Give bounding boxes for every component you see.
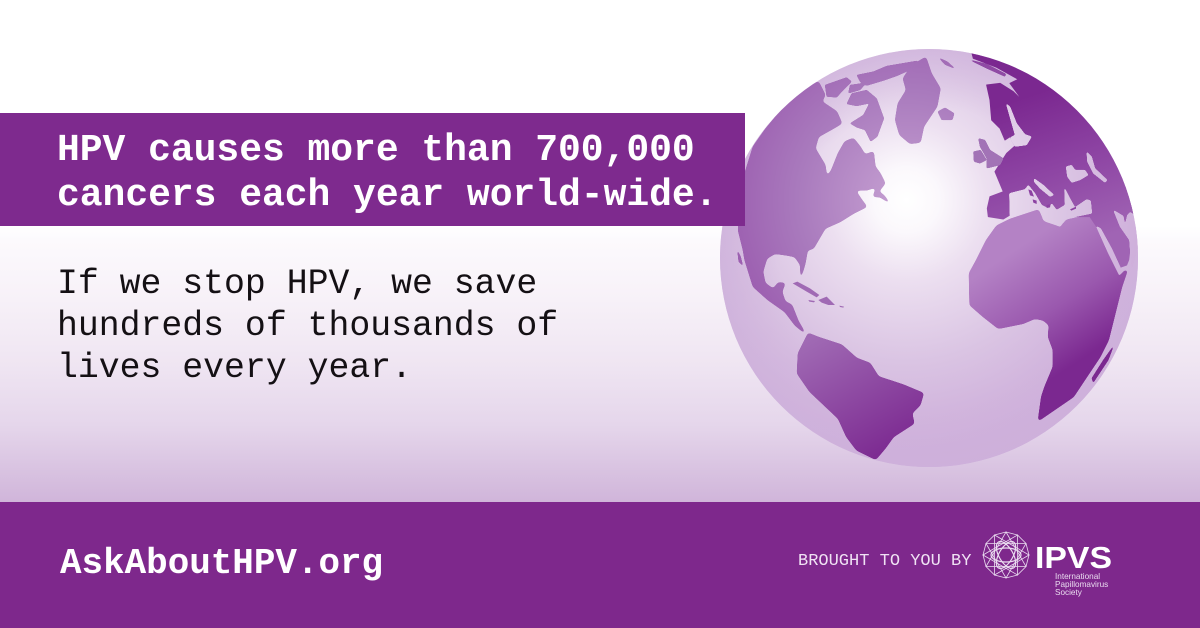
logo subtitle: International	[1055, 572, 1100, 581]
Africa	[969, 210, 1127, 421]
website link: AskAboutHPV.org	[60, 543, 383, 584]
Iceland	[938, 108, 954, 120]
Svalbard	[940, 58, 954, 68]
logo subtitle: Society	[1055, 588, 1083, 597]
continents	[737, 52, 1140, 459]
IPVS logo	[982, 531, 1112, 597]
headline banner	[0, 113, 745, 226]
Mediterranean islands	[1028, 189, 1076, 211]
footer band	[0, 502, 1200, 628]
logo subtitle: Papillomavirus	[1055, 580, 1108, 589]
Baja California	[738, 252, 742, 265]
logo emblem	[983, 532, 1029, 578]
Eurasia	[972, 52, 1133, 268]
Madagascar	[1092, 348, 1113, 382]
Baltic Sea	[1006, 103, 1032, 147]
sphere rim shading	[720, 49, 1138, 467]
Baffin and Labrador	[847, 90, 884, 142]
South America	[797, 333, 923, 459]
Novaya Zemlya strip	[972, 60, 1006, 76]
Ireland	[973, 150, 987, 163]
Greenland	[895, 57, 941, 144]
Britain	[978, 138, 1003, 168]
headline text: HPV causes more than 700,000 cancers each year world-wide.	[57, 129, 717, 217]
Red Sea	[1096, 226, 1124, 275]
body statement: If we stop HPV, we save hundreds of thousands of lives every year.	[57, 265, 558, 388]
Aral strip	[1087, 152, 1107, 183]
Persian Gulf	[1114, 210, 1138, 252]
globe illustration	[720, 49, 1138, 467]
Adriatic Sea	[1034, 178, 1054, 197]
Caspian Sea	[1066, 165, 1088, 183]
North America	[738, 82, 890, 333]
logo wordmark: IPVS	[1035, 540, 1112, 575]
Arctic islands	[825, 61, 918, 97]
Mediterranean Sea	[1009, 185, 1092, 227]
ocean sphere	[720, 49, 1138, 467]
Caribbean islands	[793, 282, 844, 308]
attribution label: BROUGHT TO YOU BY	[798, 552, 971, 571]
